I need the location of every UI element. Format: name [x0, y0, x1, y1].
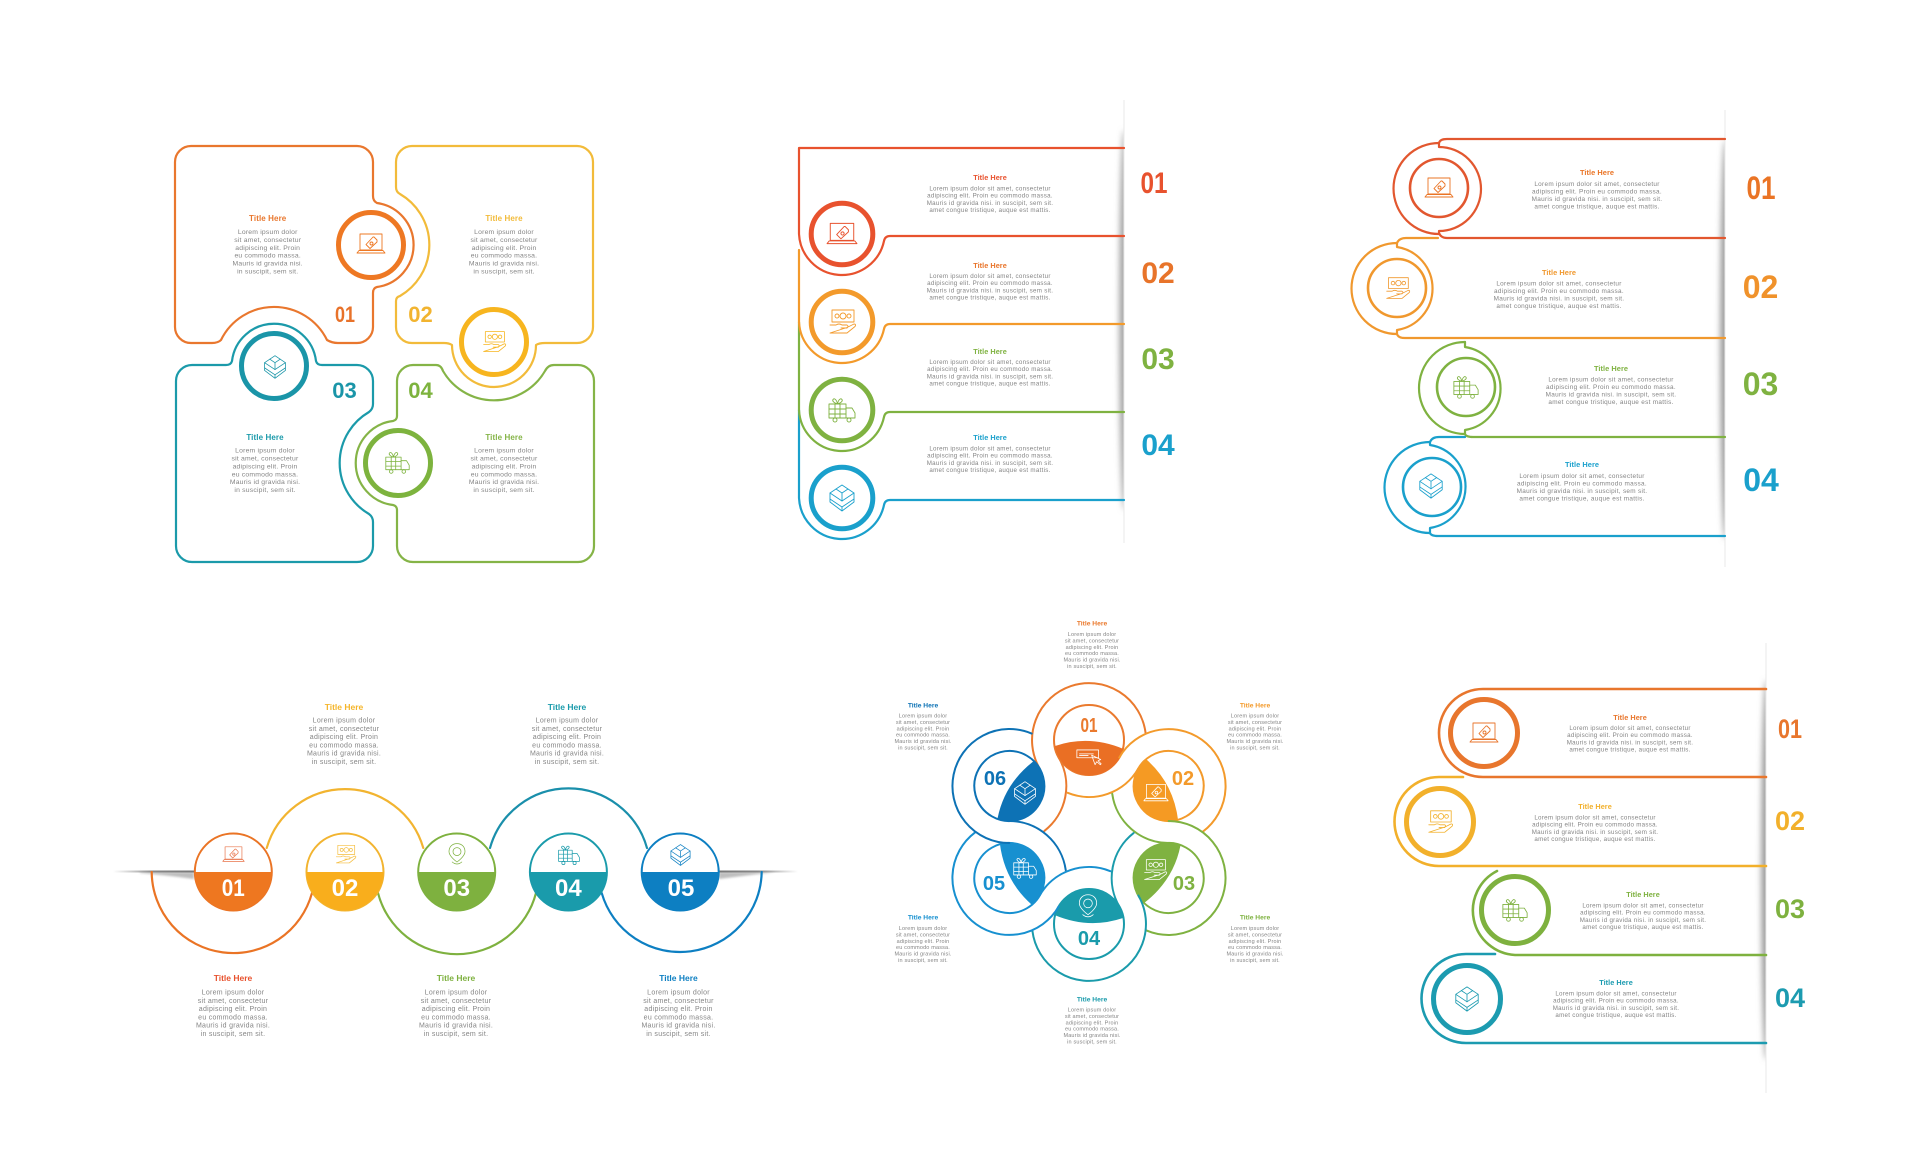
horizon shadow left [113, 870, 195, 879]
text block 06: eu commodo massa. [896, 733, 950, 739]
text block 03 [1546, 364, 1676, 406]
text block 04: in suscipit, sem sit. [535, 759, 599, 766]
ring unit 02 [1061, 708, 1246, 880]
text block 02: Title Here [1240, 702, 1270, 710]
icon: laptop [1425, 178, 1453, 197]
number 01: 01 [1140, 167, 1168, 200]
text block 06: Title Here [908, 702, 938, 710]
text block 01 [927, 173, 1053, 214]
step 03 disc [418, 834, 495, 910]
step 01 ring and laptop icon [338, 212, 404, 278]
text block 03: adipiscing elit. Proin [233, 463, 297, 470]
text block 04: Title Here [1077, 996, 1107, 1004]
text block 02 [1494, 268, 1624, 310]
text block 02: Title Here [1542, 268, 1576, 277]
text block 01: Title Here [973, 173, 1007, 182]
icon: open box [1420, 474, 1442, 498]
text block 05: in suscipit, sem sit. [646, 1031, 711, 1038]
text block 01: Title Here [1580, 168, 1614, 177]
text block 03: Title Here [1240, 914, 1270, 922]
panel: staggered list with hooked rings [1352, 110, 1779, 567]
text block 06: Lorem ipsum dolor [899, 714, 947, 720]
icon: gift truck [1454, 377, 1478, 398]
text block 03: Title Here [1626, 890, 1660, 899]
text block 02: sit amet, consectetur [1228, 720, 1282, 726]
icon: gift truck [1014, 858, 1036, 878]
text block 04 [1063, 996, 1121, 1046]
wave arc 04 [490, 788, 647, 848]
text block 04: Mauris id gravida nisi. [1063, 1033, 1121, 1039]
row outline 02 [1394, 777, 1766, 866]
number 03: 03 [1173, 873, 1195, 895]
text block 03 [1226, 914, 1284, 964]
text block 05: Title Here [908, 914, 938, 922]
text block 04: eu commodo massa. [532, 742, 602, 749]
text block 04: Title Here [1599, 978, 1633, 987]
number 01: 01 [1778, 714, 1802, 744]
text block 04: Mauris id gravida nisi. [530, 751, 604, 758]
step 04 disc: 04 [555, 875, 582, 902]
text block 04: adipiscing elit. Proin [472, 463, 536, 470]
wave arc 05 [602, 872, 762, 952]
text block 05: eu commodo massa. [896, 945, 950, 951]
text block 03: Mauris id gravida nisi. in suscipit, sem sit. [1580, 917, 1706, 924]
text block 02: adipiscing elit. Proin eu commodo massa. [1494, 288, 1624, 295]
text block 02: eu commodo massa. [1228, 733, 1282, 739]
number 04: 04 [1141, 429, 1175, 462]
text block 04 [1553, 978, 1679, 1019]
text block 01: adipiscing elit. Proin [235, 245, 300, 252]
step 03 disc: 03 [443, 875, 470, 902]
text block 01: Lorem ipsum dolor sit amet, consectetur [1534, 181, 1660, 188]
text block 02: Title Here [973, 261, 1007, 270]
text block 04: adipiscing elit. Proin eu commodo massa. [1553, 998, 1679, 1005]
text block 04: sit amet, consectetur [532, 726, 603, 733]
text block 02: Lorem ipsum dolor sit amet, consectetur [929, 273, 1051, 280]
text block 06: Mauris id gravida nisi. [894, 739, 952, 745]
text block 02: Lorem ipsum dolor sit amet, consectetur [1534, 814, 1656, 822]
text block 03: Mauris id gravida nisi. [419, 1023, 493, 1030]
text block 01 [1063, 620, 1121, 670]
text block 02: in suscipit, sem sit. [473, 268, 535, 276]
text block 02: Lorem ipsum dolor [1231, 714, 1279, 720]
ring 04 with box icon [811, 467, 873, 529]
panel: staggered pill list [1394, 643, 1805, 1093]
text block 02: Mauris id gravida nisi. [1226, 739, 1284, 745]
text block 01: eu commodo massa. [1065, 651, 1119, 657]
text block 05: eu commodo massa. [644, 1014, 713, 1021]
number 06: 06 [984, 768, 1006, 790]
text block 03: sit amet, consectetur [1228, 932, 1282, 938]
text block 03 [230, 433, 300, 494]
text block 02: Lorem ipsum dolor sit amet, consectetur [1496, 280, 1622, 288]
text block 03: Mauris id gravida nisi. [1226, 952, 1284, 958]
text block 04: Lorem ipsum dolor sit amet, consectetur [1519, 473, 1645, 480]
text block 01: sit amet, consectetur [1065, 638, 1119, 644]
text block 05: sit amet, consectetur [643, 998, 714, 1005]
text block 01 [196, 973, 270, 1038]
text block 04: in suscipit, sem sit. [1067, 1040, 1117, 1046]
text block 03: amet congue tristique, auque est mattis. [1582, 924, 1704, 931]
number 02: 02 [408, 302, 433, 327]
number 05: 05 [983, 873, 1005, 895]
text block 04: Lorem ipsum dolor sit amet, consectetur [1555, 990, 1677, 998]
panel piece 03 [176, 324, 373, 562]
text block 03: Lorem ipsum dolor sit amet, consectetur [1548, 376, 1674, 384]
text block 01: Mauris id gravida nisi. in suscipit, sem sit. [1532, 196, 1662, 203]
wave arc 03 [378, 893, 536, 954]
text block 04: Lorem ipsum dolor sit amet, consectetur [929, 446, 1051, 452]
text block 01: amet congue tristique, auque est mattis. [1569, 747, 1691, 754]
text block 05: Mauris id gravida nisi. [894, 952, 952, 958]
row outline 03 [799, 322, 1124, 451]
text block 04: Lorem ipsum dolor [474, 448, 534, 455]
number 01: 01 [1746, 170, 1776, 206]
text block 05 [894, 914, 952, 964]
text block 04: Lorem ipsum dolor [1068, 1008, 1116, 1014]
text block 02 [469, 214, 539, 276]
text block 03: Mauris id gravida nisi. in suscipit, sem sit. [927, 373, 1053, 380]
text block 05: adipiscing elit. Proin [897, 939, 949, 945]
text block 01: adipiscing elit. Proin eu commodo massa. [1567, 732, 1693, 739]
icon: laptop [1144, 784, 1168, 801]
text block 04: amet congue tristique, auque est mattis. [929, 467, 1051, 474]
text block 06: adipiscing elit. Proin [897, 726, 949, 732]
text block 03: Title Here [1594, 364, 1628, 373]
number 03: 03 [332, 378, 357, 403]
text block 04: amet congue tristique, auque est mattis. [1519, 496, 1645, 502]
text block 02: Title Here [1578, 802, 1612, 811]
wave arc 01 [152, 872, 312, 953]
text block 02 [927, 261, 1053, 302]
text block 03 [927, 347, 1053, 388]
text block 03: Title Here [973, 347, 1007, 356]
text block 02: Mauris id gravida nisi. in suscipit, sem sit. [927, 287, 1053, 294]
text block 01 [1532, 168, 1662, 210]
row outline 03 [1473, 871, 1766, 955]
number 04: 04 [408, 378, 433, 403]
text block 03: Lorem ipsum dolor [235, 448, 295, 455]
panel piece 02 [396, 146, 593, 387]
text block 04: Mauris id gravida nisi. in suscipit, sem sit. [1553, 1005, 1679, 1012]
text block 03: adipiscing elit. Proin eu commodo massa. [1546, 384, 1676, 391]
text block 01 [233, 214, 303, 276]
panel: woven six-ring diagram [894, 620, 1284, 1046]
text block 05: Title Here [659, 973, 698, 983]
step 05 disc [642, 834, 719, 910]
text block 02: Mauris id gravida nisi. [307, 751, 381, 758]
text block 05: Mauris id gravida nisi. [641, 1023, 716, 1030]
text block 05: Lorem ipsum dolor [647, 990, 710, 996]
row 03 outline [1419, 342, 1725, 437]
text block 02: Title Here [485, 214, 523, 223]
row 02 outline [1352, 238, 1725, 338]
text block 03 [1580, 890, 1706, 931]
text block 02: sit amet, consectetur [309, 726, 380, 733]
ring unit 04 [1032, 833, 1146, 981]
divider shadow [1720, 110, 1730, 567]
wave arc 02 [267, 789, 423, 848]
step 02 disc: 02 [332, 875, 358, 902]
text block 03: Lorem ipsum dolor [1231, 926, 1279, 932]
text block 02: Lorem ipsum dolor [313, 718, 376, 724]
text block 03: eu commodo massa. [1228, 945, 1282, 951]
divider shadow [1761, 643, 1771, 1093]
text block 04: sit amet, consectetur [1065, 1014, 1119, 1020]
text block 04: Mauris id gravida nisi. in suscipit, sem sit. [927, 460, 1053, 467]
text block 02: amet congue tristique, auque est mattis. [1534, 836, 1656, 843]
text block 01 [1567, 713, 1693, 754]
row 04 outline [1384, 437, 1725, 536]
number 03: 03 [1775, 894, 1805, 924]
text block 02: in suscipit, sem sit. [1230, 746, 1280, 752]
text block 01: eu commodo massa. [198, 1014, 268, 1021]
text block 03: in suscipit, sem sit. [424, 1031, 488, 1038]
text block 02: eu commodo massa. [471, 253, 537, 260]
text block 01: adipiscing elit. Proin [199, 1006, 267, 1013]
text block 03: eu commodo massa. [232, 471, 298, 478]
text block 02: adipiscing elit. Proin eu commodo massa. [1532, 822, 1658, 829]
step 03 ring and box icon [242, 334, 306, 398]
text block 02: Lorem ipsum dolor [474, 229, 534, 236]
text block 02: adipiscing elit. Proin eu commodo massa. [927, 280, 1053, 287]
step 02 ring and money icon [462, 310, 526, 374]
text block 03: adipiscing elit. Proin eu commodo massa. [1580, 910, 1706, 917]
text block 01: adipiscing elit. Proin [1066, 645, 1118, 651]
panel piece 04 [356, 365, 594, 562]
text block 02: Mauris id gravida nisi. in suscipit, sem sit. [1494, 296, 1624, 302]
number 01: 01 [1080, 715, 1098, 737]
number 01: 01 [335, 302, 355, 327]
text block 03: adipiscing elit. Proin [1229, 939, 1281, 945]
text block 04: in suscipit, sem sit. [473, 487, 535, 494]
text block 02: adipiscing elit. Proin [310, 734, 378, 741]
text block 04: Title Here [973, 433, 1007, 442]
text block 01: Mauris id gravida nisi. [233, 261, 303, 268]
number 04: 04 [1743, 462, 1779, 498]
ring 04 with box icon [1434, 966, 1500, 1032]
number 02: 02 [1743, 269, 1778, 305]
text block 06 [894, 702, 952, 752]
ring 02 with money icon [811, 291, 873, 353]
ring 01 with laptop icon [1450, 700, 1518, 766]
text block 06: sit amet, consectetur [896, 720, 950, 726]
icon: map pin [1079, 895, 1097, 917]
ring unit 01 [1032, 683, 1146, 831]
text block 05 [641, 973, 716, 1038]
text block 03 [419, 973, 493, 1038]
text block 01: amet congue tristique, auque est mattis. [929, 207, 1051, 214]
row outline 01 [1439, 689, 1766, 777]
number 03: 03 [1743, 366, 1778, 402]
text block 01: sit amet, consectetur [198, 998, 269, 1005]
text block 04 [1517, 460, 1647, 502]
row outline 02 [799, 250, 1124, 363]
text block 04: adipiscing elit. Proin [1066, 1020, 1118, 1026]
step 02 disc [306, 834, 384, 910]
text block 01: eu commodo massa. [234, 253, 301, 260]
text block 03: adipiscing elit. Proin [422, 1006, 490, 1013]
text block 05: Lorem ipsum dolor [899, 926, 947, 932]
text block 04: Lorem ipsum dolor [536, 718, 599, 724]
icon: money in hand [1387, 278, 1410, 298]
number 02: 02 [1172, 768, 1194, 790]
text block 02: eu commodo massa. [309, 742, 379, 749]
text block 01: adipiscing elit. Proin eu commodo massa. [1532, 188, 1662, 196]
step 01 disc: 01 [222, 875, 245, 902]
text block 01: Mauris id gravida nisi. [196, 1023, 270, 1030]
text block 03: Lorem ipsum dolor [425, 990, 488, 996]
text block 01: in suscipit, sem sit. [201, 1031, 265, 1038]
text block 02: adipiscing elit. Proin [472, 245, 536, 252]
text block 01: Mauris id gravida nisi. [1063, 658, 1121, 664]
ring unit 05 [932, 784, 1117, 956]
text block 01: in suscipit, sem sit. [237, 268, 298, 276]
icon: cursor card [1077, 750, 1101, 765]
text block 02: amet congue tristique, auque est mattis. [1496, 303, 1622, 310]
text block 03: Title Here [246, 433, 284, 442]
ring unit 03 [1062, 783, 1246, 955]
text block 03: Mauris id gravida nisi. in suscipit, sem sit. [1546, 392, 1676, 398]
text block 01: sit amet, consectetur [234, 237, 302, 244]
text block 02 [307, 702, 381, 766]
text block 06: in suscipit, sem sit. [898, 746, 948, 752]
number 02: 02 [1775, 806, 1805, 836]
step 01 disc [195, 834, 272, 910]
text block 01: Title Here [249, 214, 287, 223]
text block 03: amet congue tristique, auque est mattis. [929, 381, 1051, 388]
text block 01: Mauris id gravida nisi. in suscipit, sem sit. [927, 200, 1053, 207]
step 04 ring and truck icon [366, 430, 430, 496]
text block 02: amet congue tristique, auque est mattis. [929, 295, 1051, 302]
text block 04 [927, 433, 1053, 474]
text block 04 [530, 702, 604, 766]
row outline 04 [799, 410, 1124, 539]
text block 01: Lorem ipsum dolor [238, 229, 298, 236]
panel: stacked list with filled rings [799, 100, 1175, 543]
text block 04 [469, 433, 539, 494]
text block 03: Lorem ipsum dolor sit amet, consectetur [1582, 902, 1704, 910]
text block 05: sit amet, consectetur [896, 932, 950, 938]
text block 04: adipiscing elit. Proin eu commodo massa. [927, 453, 1053, 460]
text block 04: Title Here [1565, 460, 1599, 469]
icon: money in hand [1145, 860, 1167, 880]
divider shadow [1119, 100, 1129, 543]
text block 03: adipiscing elit. Proin eu commodo massa. [927, 366, 1053, 373]
text block 01: Title Here [214, 973, 253, 983]
text block 02 [1532, 802, 1658, 843]
text block 03: eu commodo massa. [421, 1014, 491, 1021]
number 02: 02 [1141, 257, 1175, 290]
text block 02: in suscipit, sem sit. [312, 759, 376, 766]
text block 01: Title Here [1077, 620, 1107, 628]
text block 01: in suscipit, sem sit. [1067, 664, 1117, 670]
text block 03: in suscipit, sem sit. [234, 487, 296, 494]
text block 02: Title Here [325, 702, 364, 712]
row 01 outline [1394, 139, 1725, 238]
text block 02: sit amet, consectetur [471, 237, 538, 244]
step 05 disc: 05 [668, 875, 694, 902]
text block 02 [1226, 702, 1284, 752]
text block 03: Mauris id gravida nisi. [230, 479, 300, 486]
text block 05: in suscipit, sem sit. [898, 958, 948, 964]
text block 01: Lorem ipsum dolor sit amet, consectetur [929, 186, 1051, 192]
panel piece 01 [175, 146, 414, 343]
ring unit 06 [932, 709, 1116, 881]
text block 04: Mauris id gravida nisi. [469, 479, 539, 486]
text block 03: amet congue tristique, auque est mattis. [1548, 399, 1674, 406]
row outline 01 [799, 148, 1124, 275]
text block 03: Title Here [437, 973, 476, 983]
icon: open box [1015, 782, 1035, 804]
text block 04: Title Here [485, 433, 523, 442]
horizon shadow right [718, 870, 798, 879]
text block 01: Lorem ipsum dolor [202, 990, 265, 996]
number 04: 04 [1775, 983, 1805, 1013]
text block 04: eu commodo massa. [471, 471, 537, 478]
text block 01: adipiscing elit. Proin eu commodo massa. [927, 193, 1053, 200]
text block 01: amet congue tristique, auque est mattis. [1534, 204, 1660, 210]
text block 04: sit amet, consectetur [471, 456, 538, 462]
text block 01: Mauris id gravida nisi. in suscipit, sem sit. [1567, 739, 1693, 746]
panel: four-piece puzzle diagram [175, 146, 594, 562]
ring 01 with laptop icon [811, 203, 873, 265]
text block 04: Title Here [548, 702, 587, 712]
text block 04: adipiscing elit. Proin eu commodo massa. [1517, 480, 1647, 488]
row outline 04 [1422, 954, 1766, 1043]
text block 03: sit amet, consectetur [421, 998, 492, 1005]
ring 02 with money icon [1406, 788, 1474, 856]
text block 01: Lorem ipsum dolor [1068, 632, 1116, 638]
text block 02: Mauris id gravida nisi. [469, 261, 539, 268]
number 03: 03 [1141, 343, 1175, 376]
text block 04: adipiscing elit. Proin [533, 734, 601, 741]
text block 04: eu commodo massa. [1065, 1027, 1119, 1033]
text block 04: amet congue tristique, auque est mattis. [1555, 1012, 1677, 1019]
text block 03: Lorem ipsum dolor sit amet, consectetur [929, 359, 1051, 366]
ring 03 with truck icon [1482, 876, 1548, 944]
ring 03 with truck icon [811, 379, 873, 441]
text block 02: Mauris id gravida nisi. in suscipit, sem sit. [1532, 829, 1658, 836]
text block 03: in suscipit, sem sit. [1230, 958, 1280, 964]
text block 05: adipiscing elit. Proin [644, 1006, 713, 1013]
text block 04: Mauris id gravida nisi. in suscipit, sem sit. [1517, 488, 1647, 495]
text block 02: adipiscing elit. Proin [1229, 726, 1281, 732]
number 04: 04 [1078, 928, 1101, 950]
text block 01: Lorem ipsum dolor sit amet, consectetur [1569, 725, 1691, 732]
text block 01: Title Here [1613, 713, 1647, 722]
panel: wave timeline [113, 702, 798, 1038]
step 04 disc [530, 834, 607, 910]
text block 03: sit amet, consectetur [232, 456, 299, 462]
